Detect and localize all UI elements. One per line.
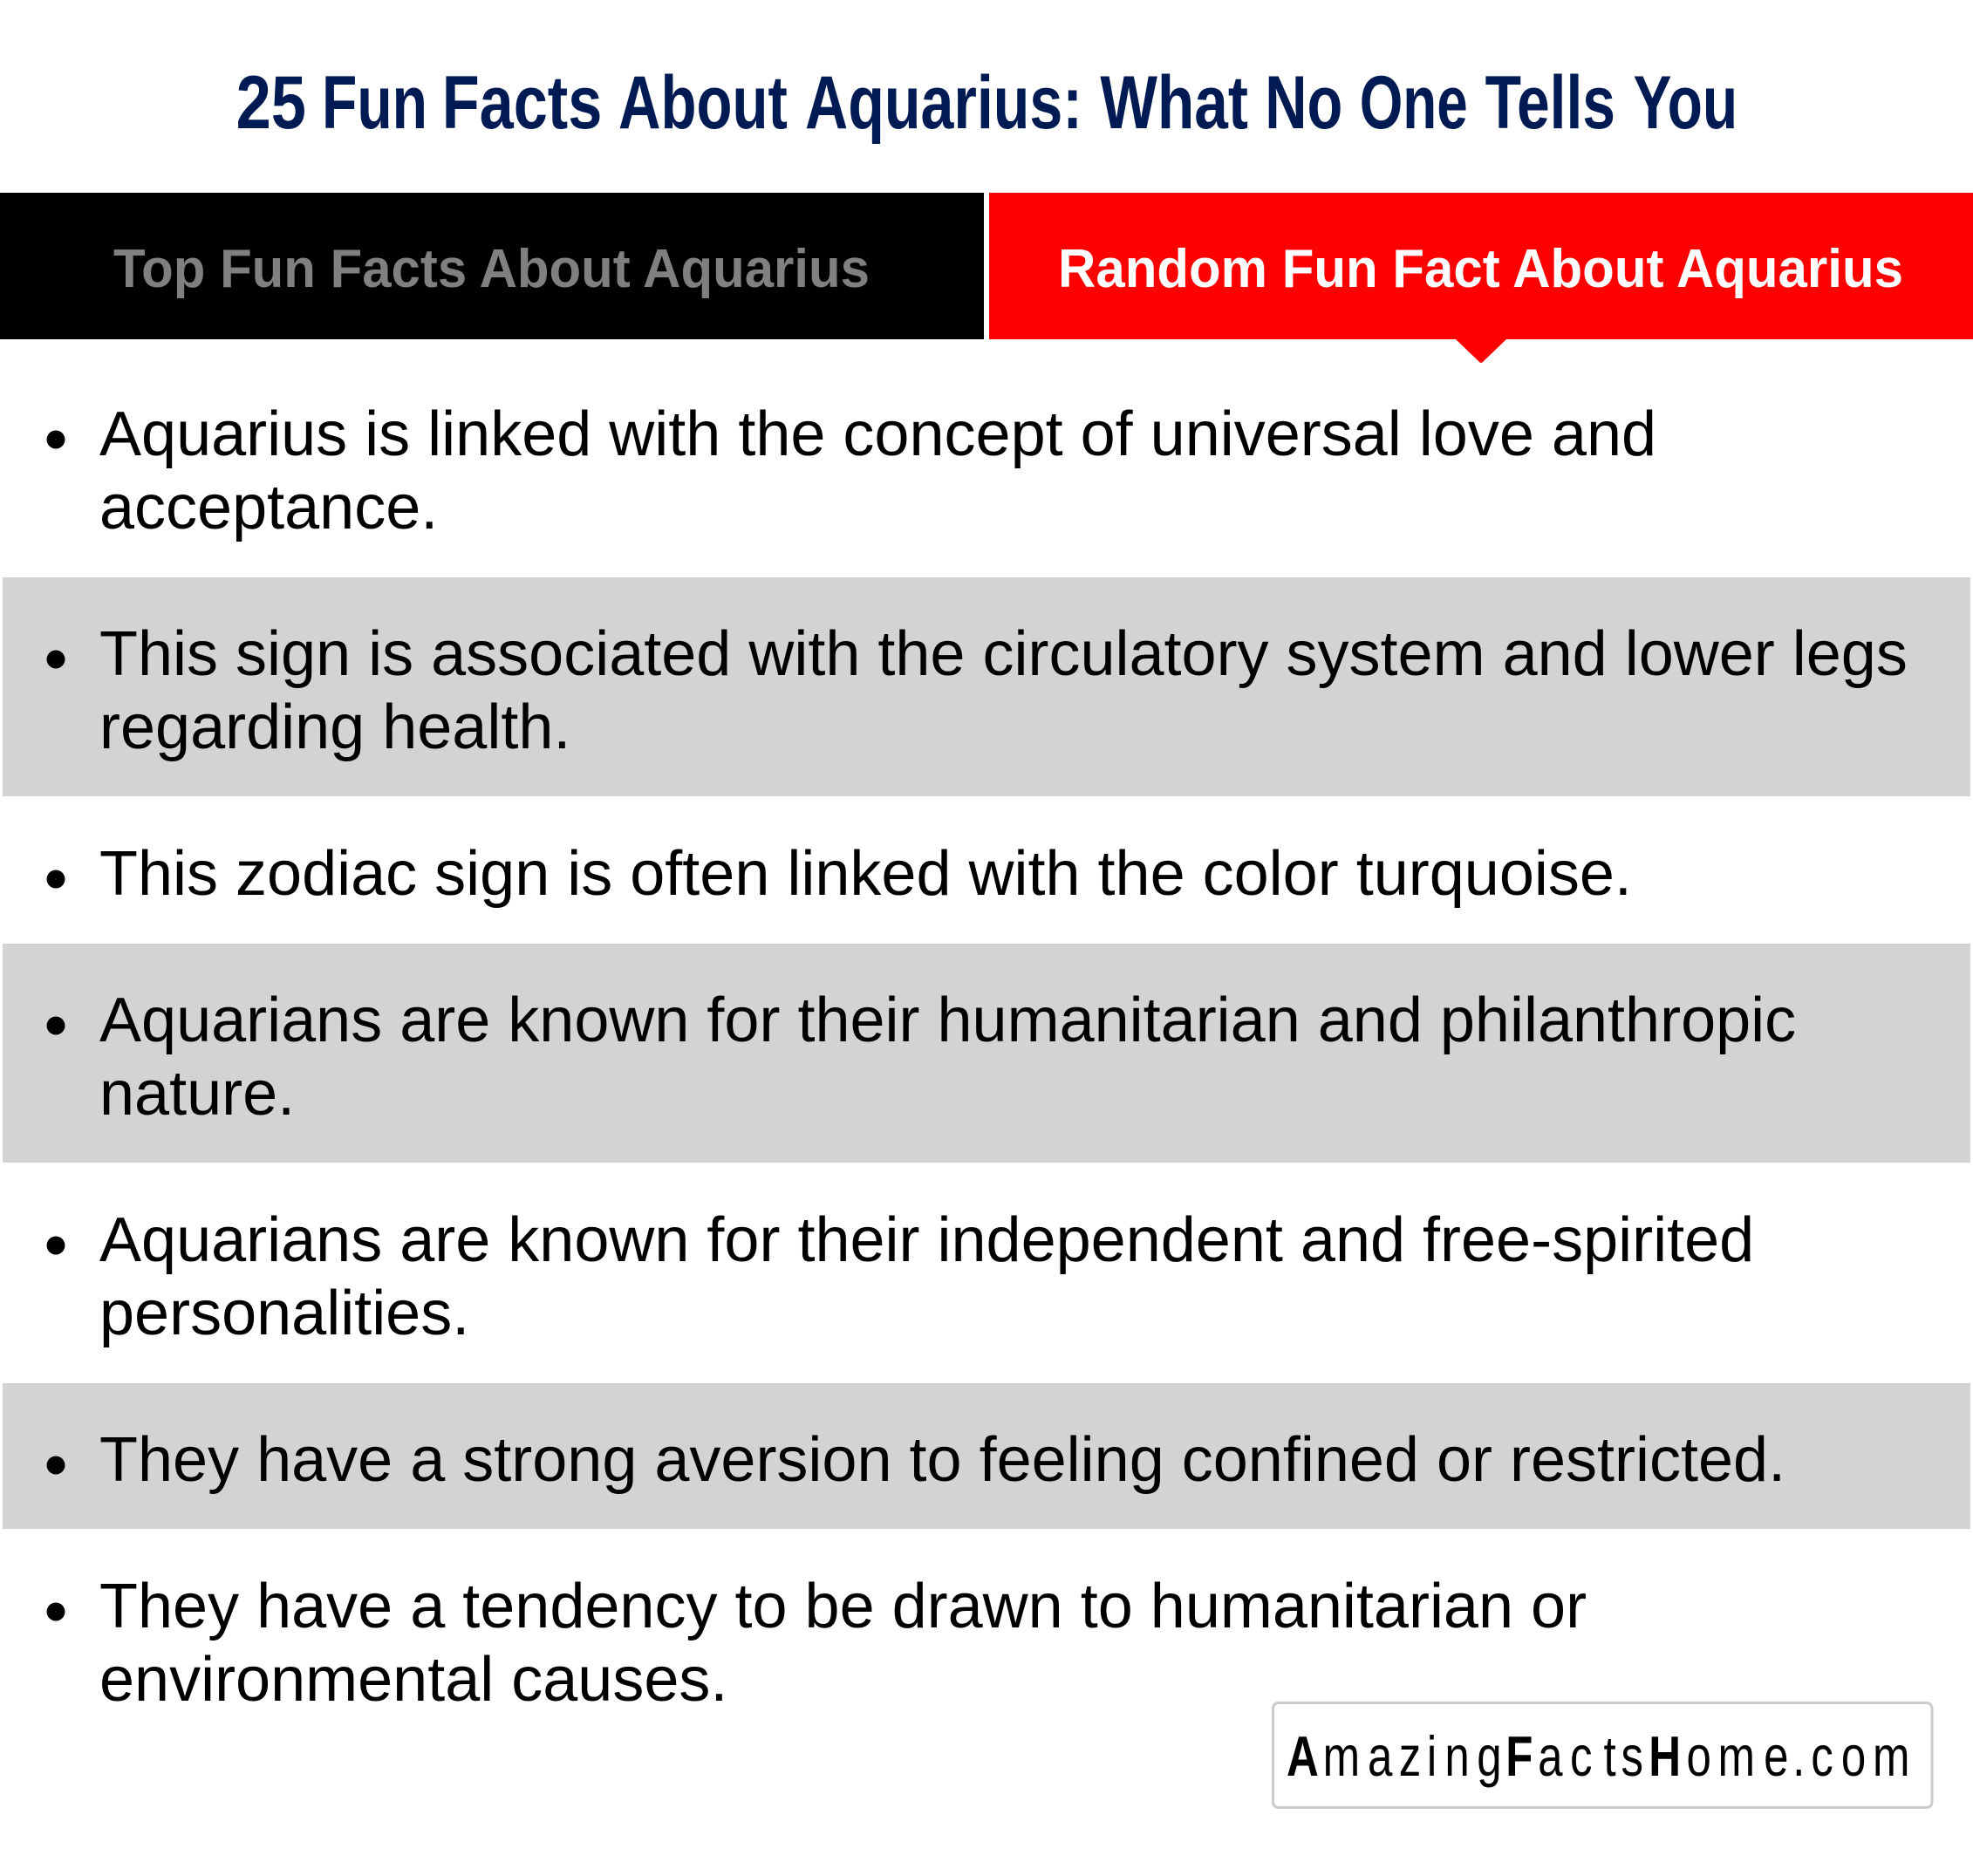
row 4 — [3, 944, 1970, 1163]
row 2: regarding health. — [99, 692, 570, 762]
title: No — [1265, 61, 1342, 145]
row 5: Aquarians are known for their independent and free-spirited — [99, 1205, 1754, 1275]
title: Aquarius: — [805, 61, 1082, 145]
row 7 — [47, 1572, 1587, 1715]
title: Facts — [442, 61, 602, 145]
title: You — [1633, 61, 1737, 145]
tab: random fun fact: Random Fun Fact About Aquarius — [1058, 239, 1903, 299]
row 4: nature. — [99, 1059, 295, 1129]
logo: AmazingFactsHome.com — [1273, 1702, 1932, 1807]
title: 25 — [236, 61, 306, 145]
row 1: Aquarius is linked with the concept of universal love and — [99, 399, 1656, 469]
title: About — [618, 61, 788, 145]
title: One — [1360, 61, 1468, 145]
row 6: They have a strong aversion to feeling confined or restricted. — [99, 1425, 1785, 1495]
title: Tells — [1485, 61, 1615, 145]
row 4: Aquarians are known for their humanitarian and philanthropic — [99, 986, 1796, 1055]
title: Fun — [322, 61, 427, 145]
row 5 — [47, 1205, 1754, 1348]
title: What — [1100, 61, 1248, 145]
row 1 — [47, 399, 1656, 542]
logo: AmazingFactsHome.com: AmazingFactsHome.com — [1287, 1725, 1909, 1788]
row 3: This zodiac sign is often linked with the color turquoise. — [99, 839, 1632, 909]
row 6 — [3, 1383, 1970, 1529]
row 7: They have a tendency to be drawn to humanitarian or — [99, 1572, 1587, 1641]
row 2: This sign is associated with the circulatory system and lower legs — [99, 619, 1908, 689]
row 7: environmental causes. — [99, 1645, 727, 1715]
row 1: acceptance. — [99, 473, 438, 542]
tab: top fun facts: Top Fun Facts About Aquarius — [113, 239, 870, 299]
title — [236, 61, 1737, 145]
row 2 — [3, 577, 1970, 796]
tab: top fun facts — [0, 193, 984, 339]
tab: random fun fact — [989, 193, 1973, 363]
row 5: personalities. — [99, 1279, 469, 1348]
